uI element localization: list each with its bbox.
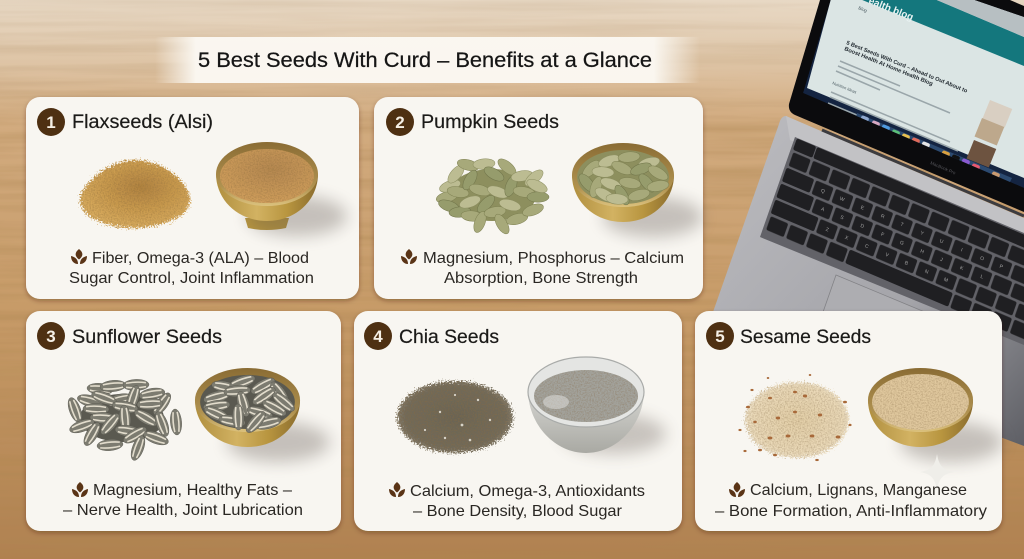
benefit text: Magnesium, Healthy Fats –	[93, 482, 292, 499]
keyboard: N	[924, 269, 929, 276]
keyboard: F	[880, 232, 885, 239]
laptop base	[713, 116, 1024, 446]
keyboard: R	[880, 213, 886, 220]
brass bowl of sesame seeds	[868, 368, 1003, 462]
benefit text: Calcium, Omega-3, Antioxidants	[410, 483, 645, 500]
panel: sesame seeds	[695, 311, 1003, 531]
keyboard: J	[939, 257, 944, 264]
benefit text: Calcium, Lignans, Manganese	[750, 482, 967, 499]
benefit text	[63, 482, 303, 519]
sunflower seed pile	[65, 379, 183, 462]
heading: Sunflower Seeds	[72, 327, 222, 348]
sesame seed pile	[738, 374, 852, 461]
laptop screen content: Nutrition Ideas	[832, 80, 857, 95]
keyboard: V	[884, 252, 890, 259]
keyboard: H	[919, 248, 925, 256]
heading: Sesame Seeds	[740, 327, 871, 348]
leaf icon	[729, 482, 745, 497]
heading: Pumpkin Seeds	[421, 112, 559, 133]
keyboard: W	[839, 196, 845, 203]
keyboard: M	[943, 277, 949, 284]
panel: flaxseeds	[26, 97, 359, 299]
brass bowl of flaxseed	[216, 142, 347, 236]
laptop	[713, 0, 1024, 446]
number badge 3	[37, 322, 65, 350]
keyboard: Q	[820, 188, 826, 195]
benefit text: Sugar Control, Joint Inflammation	[69, 270, 314, 287]
leaf icon	[401, 249, 417, 264]
keyboard: C	[864, 243, 870, 250]
leaf icon	[72, 482, 88, 497]
benefit text: – Bone Density, Blood Sugar	[413, 503, 623, 520]
keyboard: U	[939, 238, 944, 245]
keyboard: D	[860, 223, 865, 230]
benefit text: Fiber, Omega-3 (ALA) – Blood	[92, 250, 309, 267]
keyboard: B	[904, 260, 909, 267]
keyboard: G	[899, 240, 905, 247]
website header	[850, 0, 1024, 66]
keyboard: S	[839, 214, 845, 222]
keyboard: E	[860, 205, 865, 212]
sidebar thumbnails	[967, 100, 1012, 168]
panel: sunflower seeds	[26, 311, 341, 531]
keyboard: Z	[825, 227, 830, 233]
keyboard: L	[979, 274, 984, 281]
keyboard: I	[960, 247, 963, 253]
number badge 5: 5	[715, 327, 725, 346]
benefit text: – Bone Formation, Anti-Inflammatory	[715, 503, 987, 520]
heading: Chia Seeds	[399, 327, 499, 348]
pumpkin seed pile	[435, 156, 549, 236]
brass bowl of sunflower seeds	[195, 368, 330, 462]
hinge and brand	[822, 130, 1024, 216]
keyboard	[760, 137, 1024, 374]
benefit text	[389, 482, 645, 520]
number badge 1: 1	[46, 113, 56, 132]
keyboard: X	[844, 235, 850, 242]
benefit text	[715, 482, 987, 520]
number badge 4: 4	[373, 327, 383, 346]
number badge 4	[364, 322, 392, 350]
keyboard: K	[959, 265, 965, 272]
benefit text: – Nerve Health, Joint Lubrication	[63, 502, 303, 519]
laptop screen bezel	[789, 0, 1024, 212]
keyboard: P	[999, 264, 1004, 271]
laptop: MacBook Pro	[930, 160, 957, 176]
heading: Flaxseeds (Alsi)	[72, 112, 213, 133]
laptop screen content	[803, 0, 1024, 188]
keyboard: A	[820, 206, 826, 213]
app dock	[855, 113, 1012, 186]
glass bowl of soaked chia	[528, 357, 666, 454]
title: 5 Best Seeds With Curd – Benefits at a Glance	[198, 48, 652, 72]
keyboard: O	[979, 255, 985, 263]
benefit text: Magnesium, Phosphorus – Calcium	[423, 250, 684, 267]
laptop screen content: Blog	[858, 5, 868, 13]
number badge 1	[37, 108, 65, 136]
number badge 5	[706, 322, 734, 350]
leaf icon	[389, 482, 405, 497]
number badge 2	[386, 108, 414, 136]
number badge 2: 2	[395, 113, 405, 132]
article headline: 5 Best Seeds With Curd – Ahead to Out About to	[845, 40, 969, 95]
trackpad	[822, 275, 932, 315]
flaxseed pile	[80, 160, 190, 228]
number badge 3: 3	[46, 327, 56, 346]
keyboard: Y	[920, 230, 925, 237]
brass bowl of pumpkin seeds	[572, 143, 703, 237]
benefit text	[401, 249, 684, 287]
leaf icon	[71, 249, 87, 264]
laptop screen content: Boost Health At Home Health Blog	[843, 46, 934, 88]
chia seed pile	[397, 381, 513, 453]
panel: pumpkin seeds	[374, 97, 703, 299]
panel: chia seeds	[354, 311, 682, 531]
sparkle mark	[920, 454, 954, 490]
benefit text	[69, 249, 314, 287]
keyboard: T	[899, 222, 904, 228]
title banner	[155, 37, 700, 83]
benefit text: Absorption, Bone Strength	[444, 270, 638, 287]
